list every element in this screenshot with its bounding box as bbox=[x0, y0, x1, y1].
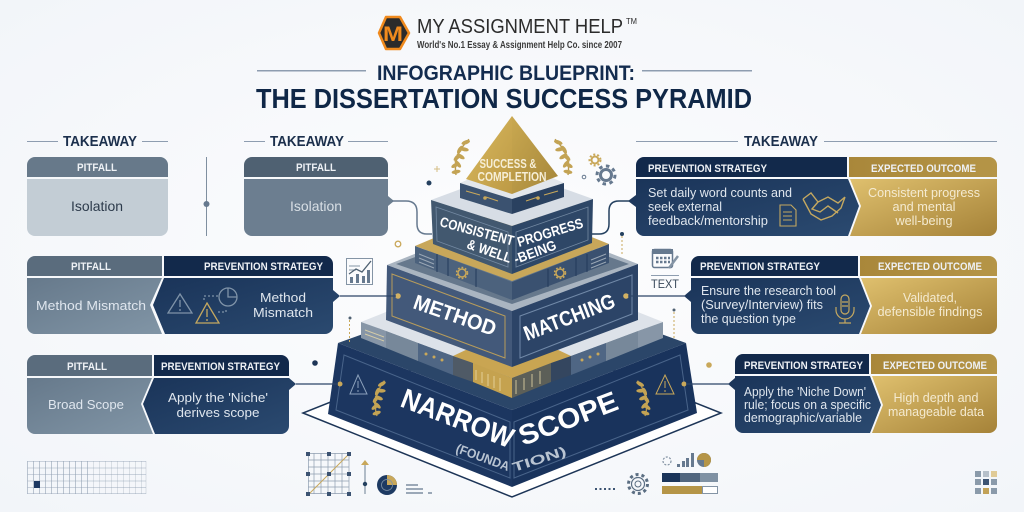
grid pattern bbox=[28, 461, 146, 494]
card: ensure research tool: defensible findings bbox=[878, 304, 983, 319]
connectors to tiers bbox=[296, 296, 730, 384]
method label bbox=[410, 290, 618, 346]
card: consistent progress strategy: seek external bbox=[648, 199, 722, 214]
gold capstone: success and completion: SUCCESS & bbox=[480, 156, 536, 171]
card: niche down: Apply the 'Niche Down' bbox=[744, 384, 866, 399]
card: niche down: rule; focus on a specific bbox=[744, 397, 871, 412]
card: ensure research tool: PREVENTION STRATEGY bbox=[700, 261, 821, 273]
logo: M bbox=[383, 23, 403, 46]
icon: gear bottom bbox=[628, 474, 648, 494]
pyramid bbox=[303, 116, 721, 497]
card: niche down: PREVENTION STRATEGY bbox=[744, 360, 864, 372]
icon: calendar and text label bbox=[651, 249, 679, 291]
card: method mismatch: PREVENTION STRATEGY bbox=[204, 261, 324, 273]
icon: calendar and text label: TEXT bbox=[651, 279, 679, 291]
card: broad scope: derives scope bbox=[176, 405, 260, 420]
method label: METHOD bbox=[410, 291, 499, 341]
base label: TION) bbox=[510, 443, 568, 475]
logo: MY ASSIGNMENT HELP bbox=[417, 16, 623, 38]
card: ensure research tool bbox=[684, 256, 997, 334]
icon: node grid bbox=[306, 452, 351, 496]
connector: consistent progress bbox=[592, 201, 630, 234]
progress bars bbox=[662, 473, 718, 494]
card: consistent progress strategy: and mental bbox=[892, 199, 956, 214]
consistent progress label bbox=[438, 213, 585, 267]
icon: warning left bbox=[350, 375, 367, 394]
card: consistent progress strategy: EXPECTED OUTCOME bbox=[871, 163, 976, 175]
logo: World's No.1 Essay & Assignment Help Co. since 2007 bbox=[417, 39, 622, 51]
icon: warning and pie bbox=[168, 288, 237, 323]
card: method mismatch: Method bbox=[260, 290, 306, 305]
card: niche down: EXPECTED OUTCOME bbox=[883, 360, 987, 372]
icon: chart bbox=[346, 258, 372, 284]
title: THE DISSERTATION SUCCESS PYRAMID bbox=[256, 83, 752, 114]
tier: consistent progress bbox=[431, 170, 593, 274]
card: niche down: High depth and bbox=[894, 390, 978, 405]
heading: takeaway 3: TAKEAWAY bbox=[744, 134, 818, 150]
card: broad scope: Apply the 'Niche' bbox=[168, 390, 268, 405]
card: ensure research tool: Ensure the research tool bbox=[701, 283, 836, 298]
icon: dots row bbox=[595, 488, 617, 490]
card: consistent progress strategy: feedback/mentorship bbox=[648, 213, 768, 228]
card: isolation pitfall dark: PITFALL bbox=[296, 162, 336, 174]
tier: method matching bbox=[386, 215, 638, 367]
icon: gear right bbox=[554, 268, 566, 278]
heading: takeaway 2: TAKEAWAY bbox=[270, 134, 344, 150]
card: broad scope: PITFALL bbox=[67, 361, 107, 373]
divider with dot bbox=[204, 157, 210, 236]
base plate bbox=[303, 330, 721, 497]
base label: NARROW bbox=[397, 383, 519, 454]
icon: handshake bbox=[803, 193, 845, 220]
icon: laurel left bbox=[369, 379, 388, 418]
consistent progress label: -BEING bbox=[512, 237, 558, 267]
base label bbox=[397, 383, 622, 475]
card: niche down: manageable data bbox=[888, 404, 985, 419]
connector: isolation to tier bbox=[392, 201, 432, 234]
icon: microphone bbox=[836, 295, 854, 323]
card: consistent progress strategy: Consistent progress bbox=[868, 185, 980, 200]
icon: gears bbox=[582, 154, 615, 184]
gold capstone: success and completion bbox=[466, 116, 558, 194]
logo bbox=[379, 16, 637, 51]
consistent progress label: CONSISTENT bbox=[438, 213, 516, 249]
base label: SCOPE bbox=[514, 385, 622, 452]
icon: small chart set bbox=[663, 453, 711, 467]
icon: square grid bbox=[975, 471, 997, 494]
card: isolation pitfall light: PITFALL bbox=[77, 162, 117, 174]
card: niche down: demographic/variable bbox=[744, 410, 862, 425]
card: isolation pitfall light bbox=[27, 157, 168, 236]
card: ensure research tool: Validated, bbox=[903, 290, 957, 305]
icon: laurel top right bbox=[551, 136, 577, 177]
icon: text lines bbox=[406, 485, 432, 493]
title: INFOGRAPHIC BLUEPRINT: bbox=[377, 62, 635, 85]
card: method mismatch: PITFALL bbox=[71, 261, 111, 273]
icon: laurel top left bbox=[447, 136, 473, 177]
logo: TM bbox=[626, 17, 637, 26]
card: isolation pitfall dark: Isolation bbox=[290, 198, 342, 214]
icon: gear left bbox=[456, 268, 468, 278]
card: consistent progress strategy: PREVENTION STRATEGY bbox=[648, 163, 768, 175]
heading: takeaway 1: TAKEAWAY bbox=[63, 134, 137, 150]
card: consistent progress strategy: Set daily word counts and bbox=[648, 185, 792, 200]
icon: warning right bbox=[656, 375, 674, 394]
icon: laurel right bbox=[634, 379, 653, 418]
card: broad scope: Broad Scope bbox=[48, 397, 124, 412]
card: niche down bbox=[728, 354, 997, 433]
card: ensure research tool: EXPECTED OUTCOME bbox=[878, 261, 982, 273]
tier: narrow scope foundation bbox=[328, 280, 697, 487]
card: consistent progress strategy: well-being bbox=[895, 213, 952, 228]
tier: gold band bbox=[415, 205, 609, 300]
card: isolation pitfall dark bbox=[244, 157, 394, 236]
tier: stacked slab bbox=[361, 262, 663, 398]
icon: document bbox=[780, 205, 796, 226]
card: ensure research tool: (Survey/Interview) fits bbox=[701, 297, 823, 312]
card: consistent progress strategy bbox=[628, 157, 997, 236]
icon: arrow bbox=[361, 460, 369, 494]
title bbox=[256, 62, 752, 114]
card: broad scope: PREVENTION STRATEGY bbox=[161, 361, 281, 373]
card: broad scope bbox=[27, 355, 296, 434]
gold capstone: success and completion: COMPLETION bbox=[478, 170, 546, 184]
base label: (FOUNDA bbox=[454, 441, 512, 474]
card: method mismatch: Method Mismatch bbox=[36, 298, 146, 313]
decorative dots bbox=[312, 166, 712, 368]
consistent progress label: PROGRESS bbox=[515, 215, 585, 250]
method label: MATCHING bbox=[521, 290, 618, 346]
tier: capstone block bbox=[460, 160, 564, 214]
consistent progress label: & WELL bbox=[465, 236, 514, 266]
card: method mismatch bbox=[27, 256, 340, 334]
icon: radar pie bbox=[377, 475, 397, 495]
card: ensure research tool: the question type bbox=[701, 311, 796, 326]
card: method mismatch: Mismatch bbox=[253, 305, 313, 320]
card: isolation pitfall light: Isolation bbox=[71, 198, 123, 214]
